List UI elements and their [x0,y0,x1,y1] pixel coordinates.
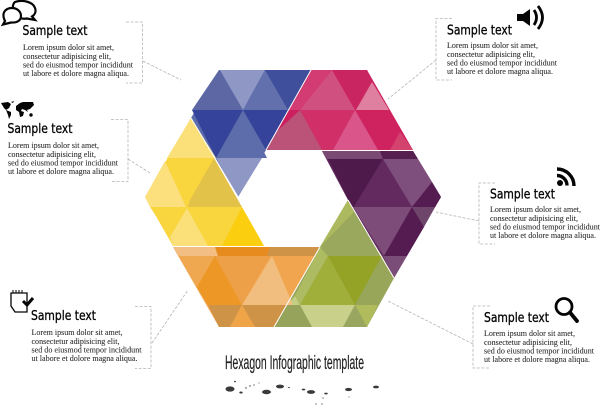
segment: blue [191,70,311,197]
text block: speech: Sample text [22,24,88,39]
icon: speaker [517,6,542,29]
connector: notepad block [135,290,188,368]
icon: notepad with check [11,290,33,312]
text block: search: Lorem ipsum dolor sit amet, [484,328,575,338]
connector: search block [388,301,490,368]
text block: notepad: Sample text [31,309,96,324]
text block: speaker: Lorem ipsum dolor sit amet, [447,40,538,50]
text block: notepad: ut labore et dolore magna aliqua. [32,353,138,363]
text block: speaker: ut labore et dolore magna aliqua. [447,66,553,76]
icon: rss [557,169,574,186]
text block: world: Sample text [8,122,72,137]
connector: speech block [126,22,181,83]
text block: world: consectetur adipisicing elit, [8,149,96,159]
text block: speech: Lorem ipsum dolor sit amet, [23,42,114,52]
text block: world: sed do eiusmod tempor incididunt [8,158,118,168]
segment separators [173,70,413,327]
text block: search: ut labore et dolore magna aliqua. [484,354,590,364]
text block: world [8,122,118,176]
text block: world: Lorem ipsum dolor sit amet, [8,140,99,150]
segment: red [266,70,413,150]
text block: notepad: Lorem ipsum dolor sit amet, [32,327,122,337]
text block: speech: sed do eiusmod tempor incididunt [23,60,133,70]
icon: world map [1,101,34,119]
text block: speaker: sed do eiusmod tempor incididunt [447,58,557,68]
segment: orange [173,247,320,327]
text block: speech: ut labore et dolore magna aliqua. [23,68,129,78]
text block: rss: consectetur adipisicing elit, [490,213,578,223]
icon: speech bubbles [3,1,36,24]
segment: yellow [145,118,264,246]
text block: rss [490,188,600,240]
segment: purple [322,151,441,278]
ink splatter [226,381,379,405]
text block: speaker: consectetur adipisicing elit, [447,49,535,59]
segment: green [274,200,394,327]
icon: magnifier [556,298,577,321]
text block: notepad [31,309,142,363]
text block: notepad: sed do eiusmod tempor incididunt [32,344,142,354]
text block: speech [22,24,133,78]
text block: speech: consectetur adipisicing elit, [23,51,111,61]
text block: rss: Sample text [490,188,555,202]
title: Hexagon Infographic template [225,353,364,374]
text block: search: consectetur adipisicing elit, [484,337,572,347]
text block: speaker: Sample text [447,24,512,38]
connector: rss block [436,183,495,244]
connector: speaker block [388,18,452,99]
hexagon diagram [145,70,441,327]
text block: notepad: consectetur adipisicing elit, [32,336,120,346]
connector: world block [111,120,150,182]
text block: world: ut labore et dolore magna aliqua. [8,166,114,176]
text block: rss: Lorem ipsum dolor sit amet, [490,204,581,214]
text block: speaker [447,24,557,76]
text block: search: Sample text [484,311,549,326]
text block: search [484,311,594,364]
